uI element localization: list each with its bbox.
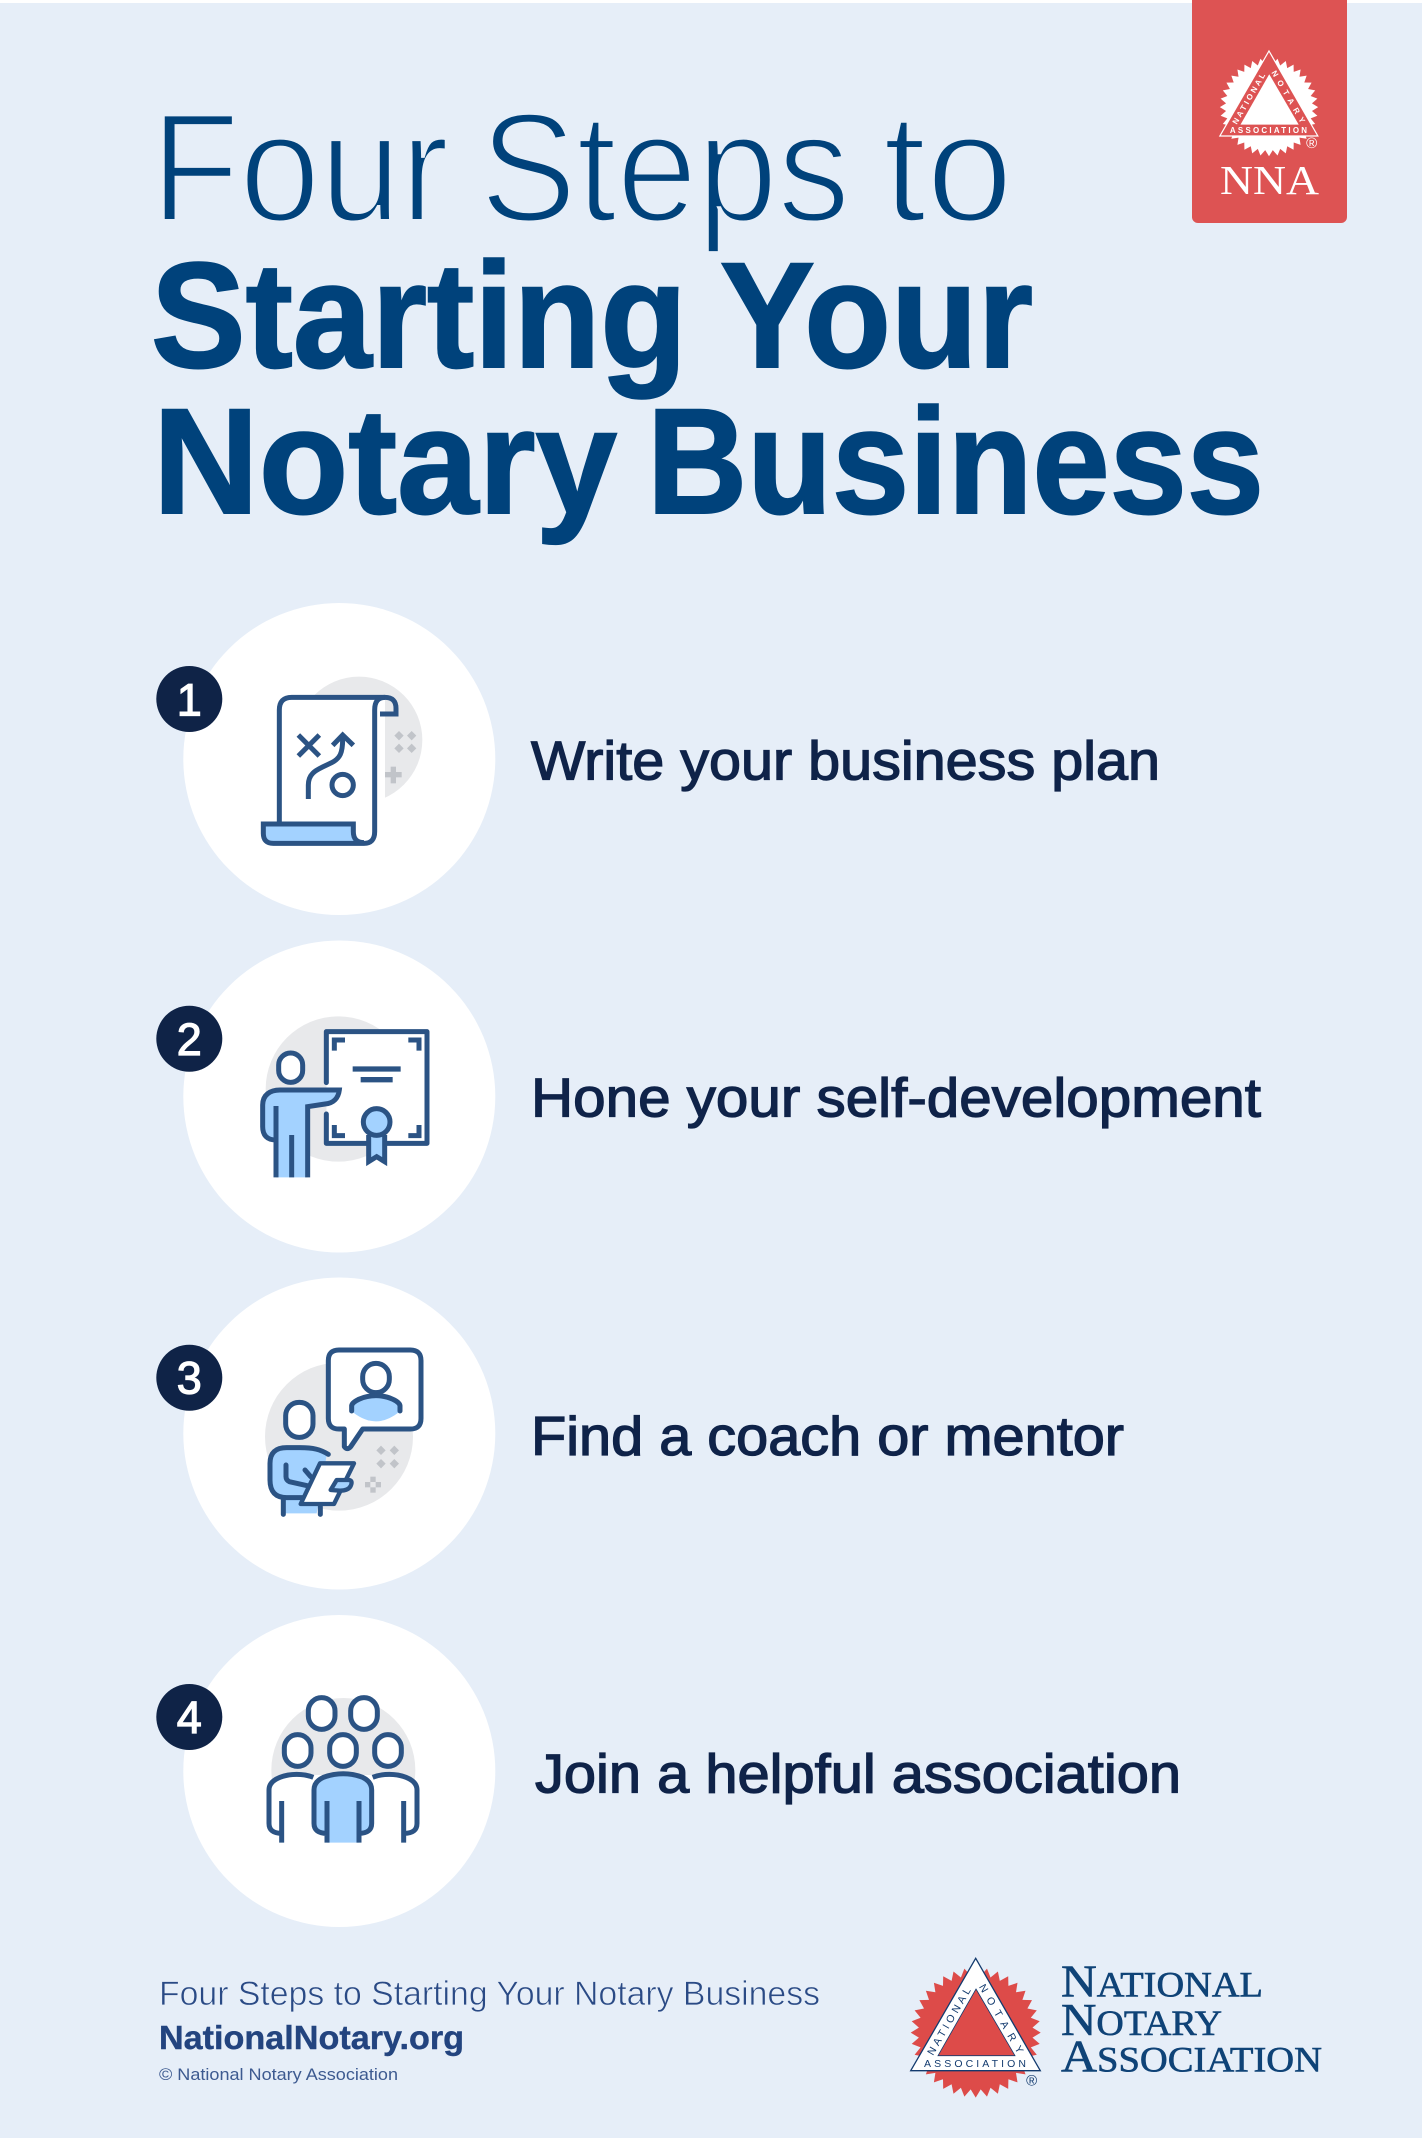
logo seal: ASSOCIATION [924, 2058, 1026, 2070]
logo wordmark: ASSOCIATION [1061, 2031, 1322, 2082]
NNA red tag logo: ® [1306, 135, 1317, 152]
step 3: find a coach or mentor [156, 1278, 1124, 1590]
step 2 circle [183, 940, 495, 1252]
logo wordmark: NOTARY [1061, 1994, 1222, 2045]
step 2 icon: person presenting certificate [263, 1016, 427, 1177]
footer text block: Four Steps to Starting Your Notary Business [159, 1975, 820, 2013]
title: Business [647, 377, 1264, 545]
step 1 circle [183, 603, 495, 915]
footer text block: NationalNotary.org [159, 2020, 464, 2057]
logo wordmark [1061, 1956, 1322, 2082]
step 4 number badge [156, 1684, 222, 1750]
title: Notary [153, 377, 617, 545]
step 3 label: Find a coach or mentor [531, 1405, 1124, 1467]
logo seal: ® [1026, 2072, 1037, 2090]
logo seal: NOTARY [976, 1982, 1025, 2056]
seal: white NNA emblem [1220, 51, 1318, 156]
logo seal [911, 1958, 1041, 2098]
step 1 number badge [156, 666, 222, 732]
step 2: hone your self-development [156, 940, 1261, 1252]
logo wordmark: NATIONAL [1061, 1956, 1263, 2007]
NNA red tag logo [1192, 0, 1347, 223]
title: Four [151, 81, 449, 254]
step 2 number badge: 2 [177, 1014, 202, 1065]
seal: white NNA emblem: NOTARY [1270, 69, 1307, 125]
seal: white NNA emblem: NATIONAL [1231, 71, 1267, 126]
step 4 label: Join a helpful association [535, 1743, 1181, 1805]
footer text block [159, 1975, 820, 2084]
step 4 number badge: 4 [177, 1692, 202, 1743]
step 1: write your business plan [156, 603, 1160, 915]
title: Starting [151, 231, 687, 399]
logo seal: NATIONAL [925, 1986, 974, 2058]
footer text block: © National Notary Association [159, 2066, 398, 2084]
step 2 number badge [156, 1006, 222, 1072]
step 1 icon: scroll plan [263, 677, 422, 843]
step 3 number badge: 3 [177, 1352, 202, 1404]
step 3 icon: person with tablet and speech bubble [265, 1350, 421, 1514]
step 4: join a helpful association [156, 1615, 1181, 1927]
title [151, 81, 1264, 545]
step 3 circle [183, 1278, 495, 1590]
title: Your [720, 231, 1033, 399]
step 2 label: Hone your self-development [531, 1067, 1261, 1129]
NNA red tag logo: NNA [1220, 157, 1319, 203]
title: to [883, 81, 1013, 254]
step 3 number badge [156, 1345, 222, 1411]
step 4 circle [183, 1615, 495, 1927]
seal: white NNA emblem: ASSOCIATION [1230, 126, 1307, 135]
National Notary Association logo [911, 1956, 1322, 2098]
step 1 label: Write your business plan [531, 730, 1160, 792]
step 4 icon: group of people [267, 1698, 419, 1843]
step 1 number badge: 1 [177, 674, 202, 726]
title: Steps [480, 81, 850, 254]
